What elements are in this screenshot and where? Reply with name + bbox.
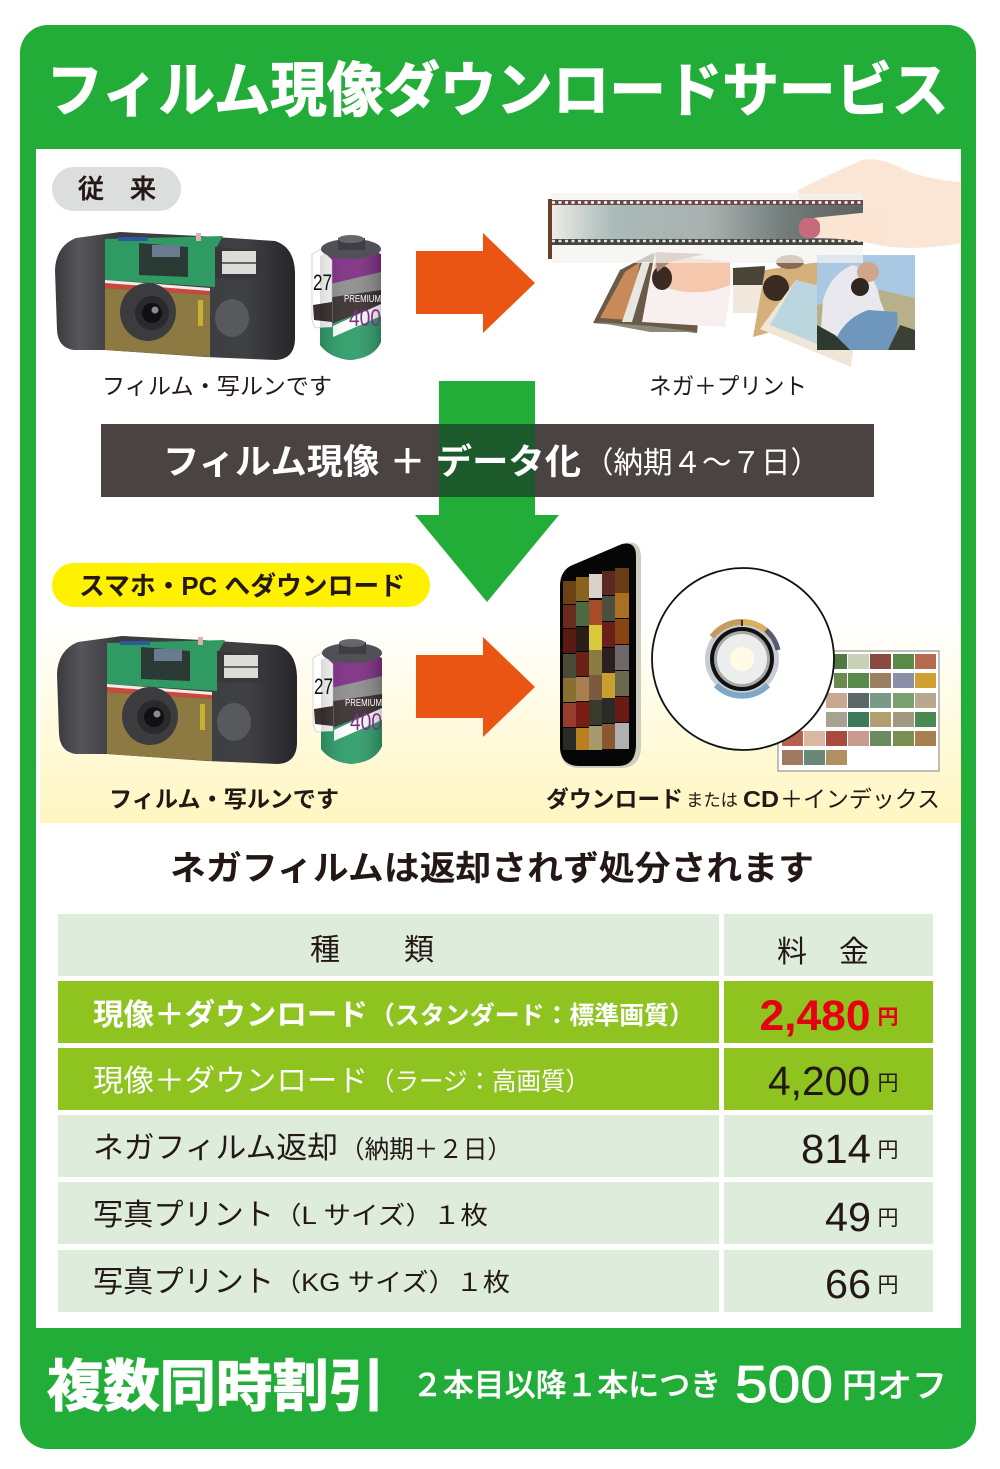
film strip xyxy=(552,193,863,263)
row: return negatives: 円 xyxy=(878,1139,898,1162)
row: L print: 円 xyxy=(878,1207,898,1230)
band: development and data xyxy=(101,424,874,497)
father photo xyxy=(817,255,915,350)
icon: film roll top xyxy=(312,235,381,360)
row: L print xyxy=(58,1182,933,1244)
label pill: smartphone and PC xyxy=(52,563,430,607)
footer: multiple discount: 円オフ xyxy=(842,1367,947,1404)
footer: multiple discount: ２本目以降１本につき xyxy=(412,1368,721,1403)
notice heading: ネガフィルムは返却されず処分されます xyxy=(170,850,814,888)
price table xyxy=(58,914,933,1312)
caption: film top: フィルム・写ルンです xyxy=(102,373,332,399)
icon: disposable camera top xyxy=(55,232,295,360)
thumb xyxy=(800,210,890,246)
row: L print: 49 xyxy=(825,1194,871,1240)
title: フィルム現像ダウンロードサービス xyxy=(46,58,948,124)
row: large: 現像＋ダウンロード xyxy=(93,1065,368,1098)
row: KG print: 66 xyxy=(825,1261,871,1307)
dark small photo xyxy=(733,266,765,313)
icon: CD xyxy=(652,568,834,750)
arrow: orange lower xyxy=(416,637,535,737)
band: development and data: フィルム現像 ＋ データ化 xyxy=(163,442,581,482)
row: standard: （スタンダード：標準画質） xyxy=(370,1001,694,1030)
row: KG print: 写真プリント xyxy=(93,1266,274,1299)
header row xyxy=(58,914,933,976)
row: return negatives: ネガフィルム返却 xyxy=(93,1132,338,1165)
row: standard: 現像＋ダウンロード xyxy=(93,998,368,1032)
print stack xyxy=(593,253,700,333)
row: return negatives: （納期＋２日） xyxy=(340,1136,512,1164)
label pill: conventional: 従 来 xyxy=(78,174,156,204)
icon: film roll top: PREMIUM xyxy=(344,294,381,305)
row: large: 4,200 xyxy=(768,1058,870,1104)
icon: film roll lower: PREMIUM xyxy=(345,698,382,709)
row: large xyxy=(58,1048,933,1110)
caption: film lower: フィルム・写ルンです xyxy=(109,786,339,812)
wood photo xyxy=(753,262,818,337)
row: large: 円 xyxy=(878,1072,898,1095)
band: development and data: （納期４～７日） xyxy=(584,447,820,480)
row: KG print: 円 xyxy=(878,1274,898,1297)
row: large: （ラージ：高画質） xyxy=(370,1068,590,1096)
icon: film roll lower: 400 xyxy=(350,709,382,736)
footer: multiple discount xyxy=(47,1355,947,1418)
label pill: smartphone and PC: スマホ・PC へダウンロード xyxy=(79,571,405,601)
baby photo xyxy=(642,252,734,327)
row: KG print: （KG サイズ）１枚 xyxy=(274,1269,510,1297)
hand xyxy=(798,159,961,248)
caption: download or CD + index: ダウンロード xyxy=(546,786,683,812)
icon: film roll lower: 27 xyxy=(314,674,333,699)
white panel xyxy=(36,149,961,1328)
footer: multiple discount: 複数同時割引 xyxy=(47,1355,385,1418)
arrow: orange top xyxy=(416,233,535,333)
row: return negatives xyxy=(58,1115,933,1177)
icon: smartphone xyxy=(560,543,641,768)
footer: multiple discount: 500 xyxy=(735,1356,833,1414)
row: return negatives: 814 xyxy=(801,1126,871,1172)
row: standard xyxy=(58,981,933,1043)
icon: disposable camera lower xyxy=(57,636,297,764)
icon: film roll lower xyxy=(313,639,382,764)
arrow: green down xyxy=(415,381,559,602)
index print xyxy=(778,651,939,771)
row: standard: 2,480 xyxy=(760,992,870,1040)
caption: download or CD + index xyxy=(546,786,940,812)
yellow gradient panel xyxy=(40,622,961,823)
caption: download or CD + index: ＋インデックス xyxy=(780,786,940,812)
icon: film roll top: 27 xyxy=(313,270,332,295)
photo: negatives and prints xyxy=(548,159,961,367)
header row: 料 金 xyxy=(777,936,869,969)
caption: download or CD + index: CD xyxy=(743,786,779,812)
row: L print: （L サイズ）１枚 xyxy=(274,1202,488,1230)
icon: film roll top: 400 xyxy=(349,305,381,332)
label pill: conventional xyxy=(52,167,181,211)
row: KG print xyxy=(58,1250,933,1312)
caption: negatives and prints: ネガ＋プリント xyxy=(649,373,807,399)
blue photo xyxy=(760,280,860,367)
caption: download or CD + index: または xyxy=(686,791,738,810)
row: standard: 円 xyxy=(878,1006,898,1029)
row: L print: 写真プリント xyxy=(93,1199,274,1232)
header row: 種 類 xyxy=(310,934,434,967)
